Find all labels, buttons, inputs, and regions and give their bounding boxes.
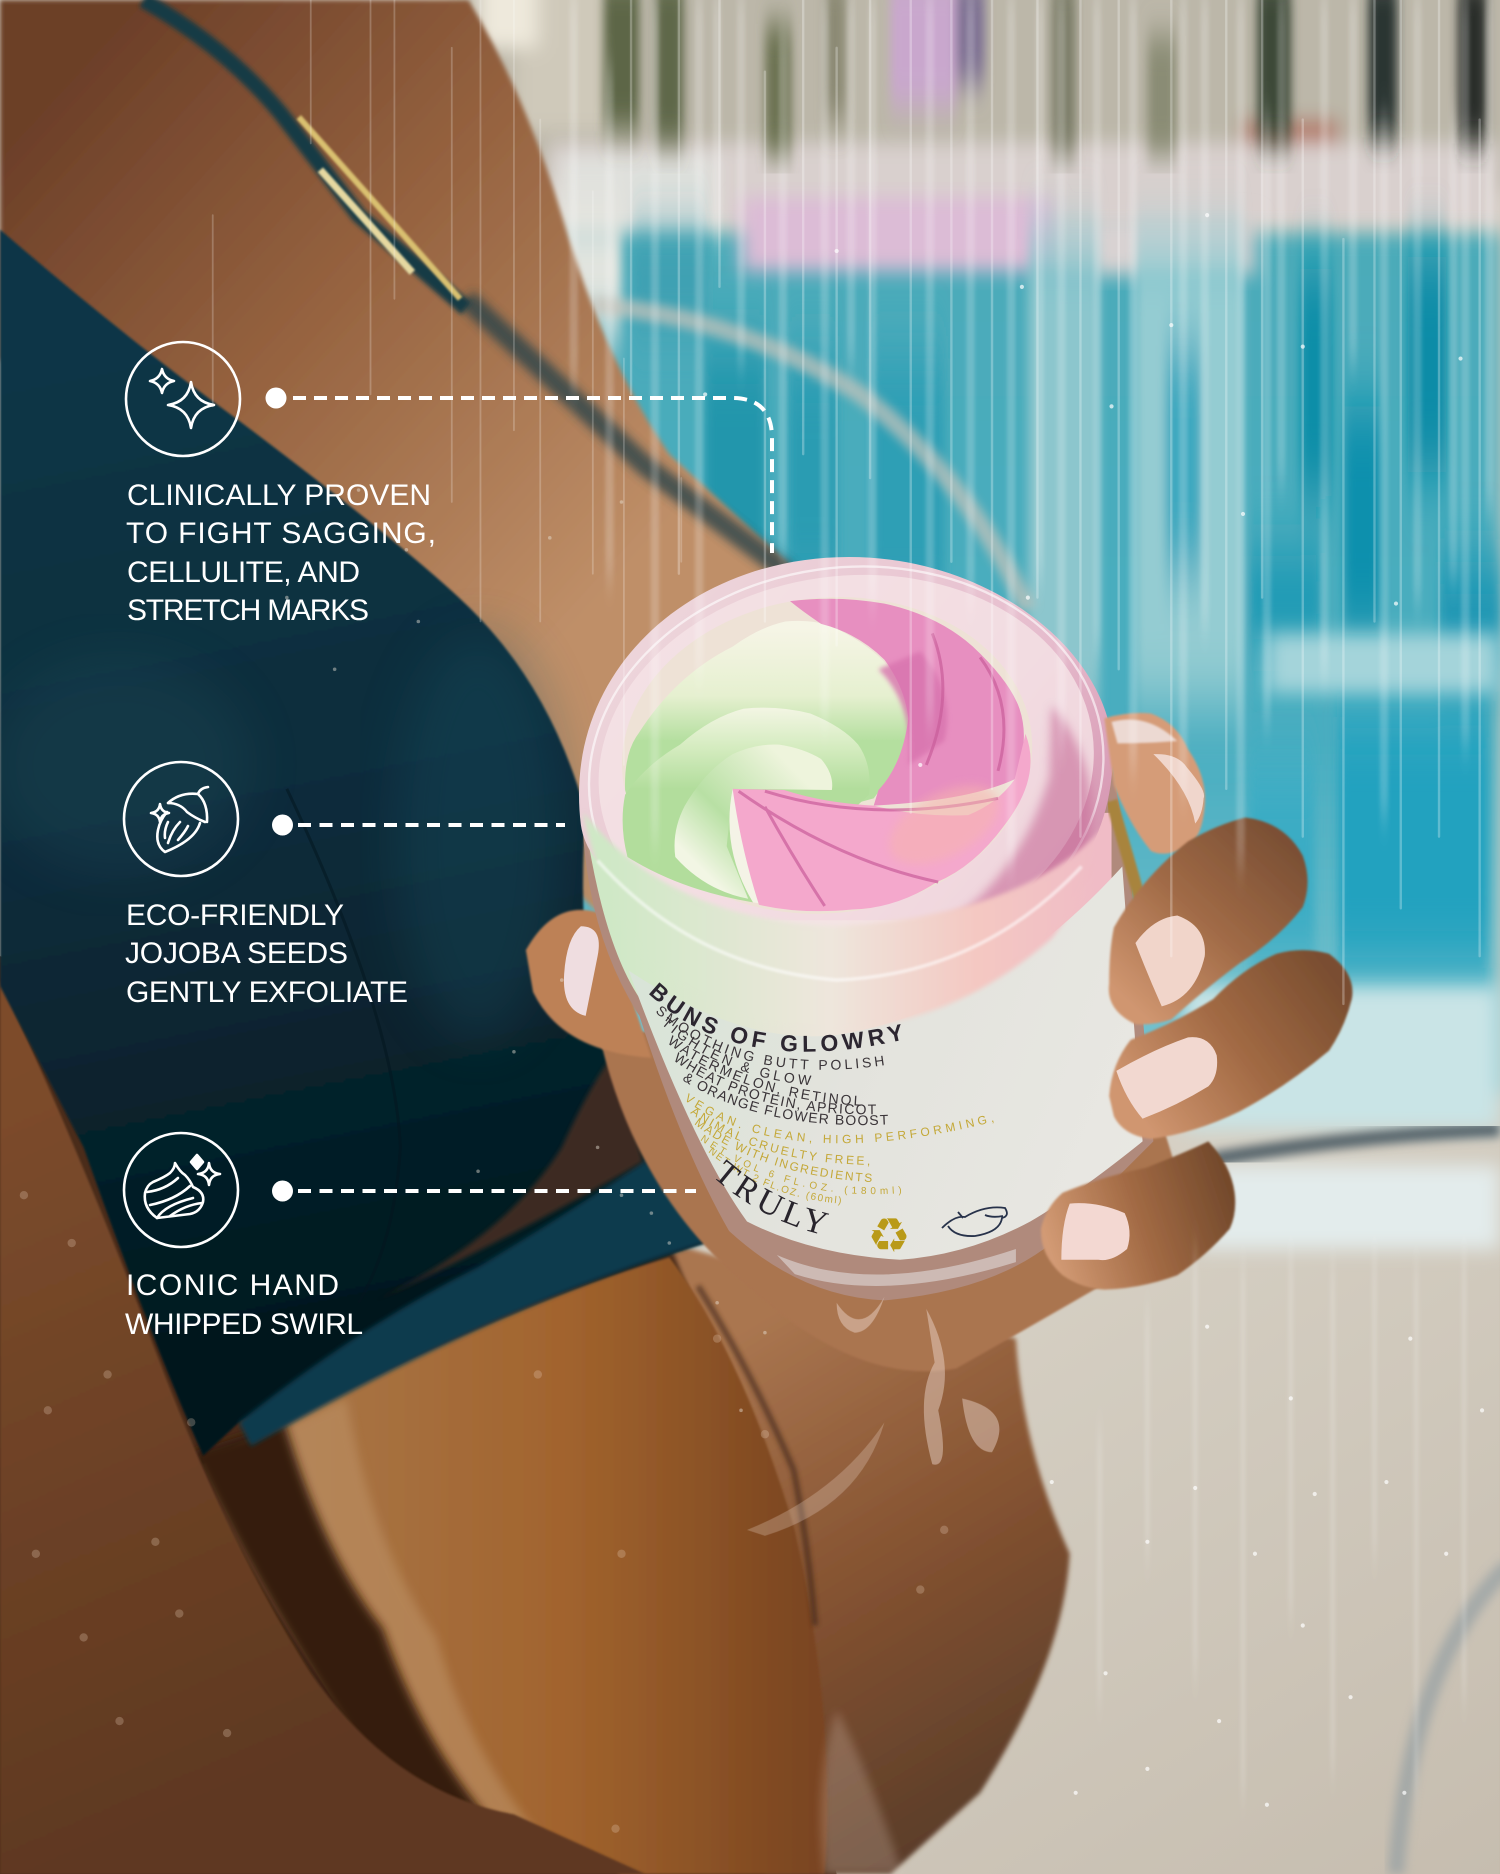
gold claims bbox=[686, 1093, 994, 1206]
third lobe: green to white bbox=[675, 744, 832, 899]
text: clinically proven: STRETCH MARKS bbox=[127, 594, 369, 627]
product descriptor: WATERMELON, RETINOL bbox=[669, 1035, 861, 1106]
shadow beneath the cup bbox=[359, 1052, 643, 1309]
product descriptor: TIGHTEN & GLOW bbox=[664, 1016, 812, 1085]
product descriptor: & ORANGE FLOWER BOOST bbox=[683, 1074, 888, 1126]
dark pink swirl lines bbox=[739, 633, 1004, 906]
text: jojoba seeds: ECO-FRIENDLY bbox=[126, 899, 344, 932]
thumb bbox=[526, 910, 651, 1058]
product descriptor bbox=[656, 1006, 888, 1126]
product descriptor: SMOOTHING BUTT POLISH bbox=[656, 1006, 884, 1070]
gold claims: NET VOL 6 FL.OZ. (180ml) bbox=[700, 1134, 901, 1196]
swimsuit strap with gold bars bbox=[143, 0, 466, 308]
connector: dot and dashed line bbox=[272, 814, 565, 836]
cream seen through the lower rim bbox=[583, 813, 1106, 1031]
text: clinically proven: CELLULITE, AND bbox=[127, 556, 360, 589]
cream visible through lower jar bbox=[586, 813, 1112, 1042]
text: whipped swirl bbox=[125, 1269, 363, 1341]
jar rim glass bbox=[579, 557, 1113, 920]
connector: dot and dashed line bbox=[272, 1180, 696, 1202]
jar bbox=[562, 534, 1153, 1300]
glass rings bbox=[562, 534, 1130, 1008]
glass base highlight bbox=[777, 1249, 1016, 1286]
blurred dark foliage streaks bbox=[604, 0, 1487, 155]
product descriptor: WHEAT PROTEIN, APRICOT bbox=[675, 1052, 876, 1114]
mid skin: thigh bbox=[203, 1257, 827, 1874]
whipped swirl cream bbox=[606, 577, 1048, 934]
shadow in skin fold bbox=[191, 1422, 484, 1814]
text: jojoba seeds: GENTLY EXFOLIATE bbox=[126, 976, 408, 1009]
pale pink tongue bbox=[733, 734, 1031, 911]
text: clinically proven bbox=[126, 479, 436, 627]
peach shading bbox=[877, 769, 1012, 880]
icon: whipped swirl in circle bbox=[124, 1133, 238, 1247]
text: jojoba seeds bbox=[125, 899, 408, 1009]
gold edge of lid bbox=[1112, 801, 1143, 908]
white center bbox=[729, 789, 779, 906]
index fingertip bbox=[1104, 713, 1205, 854]
text: clinically proven: TO FIGHT SAGGING, bbox=[126, 517, 436, 550]
jar label text bbox=[649, 982, 1008, 1264]
icon: sparkles in circle bbox=[126, 342, 240, 456]
brand name: TRULY bbox=[716, 1159, 830, 1234]
middle finger bbox=[1109, 818, 1308, 1024]
pale band of skin bbox=[281, 1398, 538, 1835]
text: clinically proven: CLINICALLY PROVEN bbox=[127, 479, 431, 512]
fingers bbox=[1041, 713, 1352, 1290]
gold claims: ANIMAL CRUELTY FREE, bbox=[690, 1108, 870, 1166]
text: jojoba seeds: JOJOBA SEEDS bbox=[125, 937, 348, 970]
skin base under body shapes bbox=[0, 956, 837, 1874]
callout 1: clinically proven bbox=[126, 342, 772, 627]
icon: jojoba seed in circle bbox=[124, 762, 238, 876]
swimsuit bbox=[0, 229, 789, 1456]
dark crease beside wrist bbox=[698, 1286, 815, 1625]
upper skin: shoulder and back bbox=[0, 0, 813, 956]
icon: rabbit bbox=[942, 1207, 1007, 1236]
deep pink shadow in swirl bbox=[878, 651, 947, 765]
gold claims: VEGAN. CLEAN, HIGH PERFORMING, bbox=[686, 1093, 994, 1144]
ring finger bbox=[1109, 950, 1352, 1139]
left skin: lower hip bbox=[0, 980, 645, 1874]
water drips bbox=[747, 1297, 999, 1874]
pinky bbox=[1041, 1141, 1235, 1290]
pink glass side reflection bbox=[944, 705, 1092, 950]
text: whipped swirl: WHIPPED SWIRL bbox=[125, 1308, 363, 1341]
lower rim glass line bbox=[598, 861, 1082, 980]
hand behind the jar bbox=[598, 1028, 1195, 1371]
lower arm and wrist bbox=[669, 1243, 1070, 1874]
callout 3: whipped swirl bbox=[124, 1133, 696, 1341]
jar label bbox=[629, 867, 1143, 1260]
second lobe: green bbox=[623, 708, 870, 902]
callout 2: jojoba seeds bbox=[124, 762, 565, 1009]
connector: dot and dashed line to jar lid bbox=[266, 388, 772, 553]
lower swimsuit band bbox=[239, 1159, 705, 1446]
product name: BUNS OF GLOWRY bbox=[649, 982, 901, 1052]
gold claims: MADE WITH INGREDIENTS bbox=[694, 1118, 872, 1182]
upper pink swirl bbox=[790, 599, 1024, 806]
icon: recycling: ♻ bbox=[867, 1208, 911, 1264]
outer lobe: white top bbox=[625, 621, 908, 861]
jar glass body bbox=[582, 765, 1153, 1300]
text: whipped swirl: ICONIC HAND bbox=[126, 1269, 339, 1302]
gold claims: NET WT 2 FL.OZ. (60ml) bbox=[708, 1147, 841, 1206]
